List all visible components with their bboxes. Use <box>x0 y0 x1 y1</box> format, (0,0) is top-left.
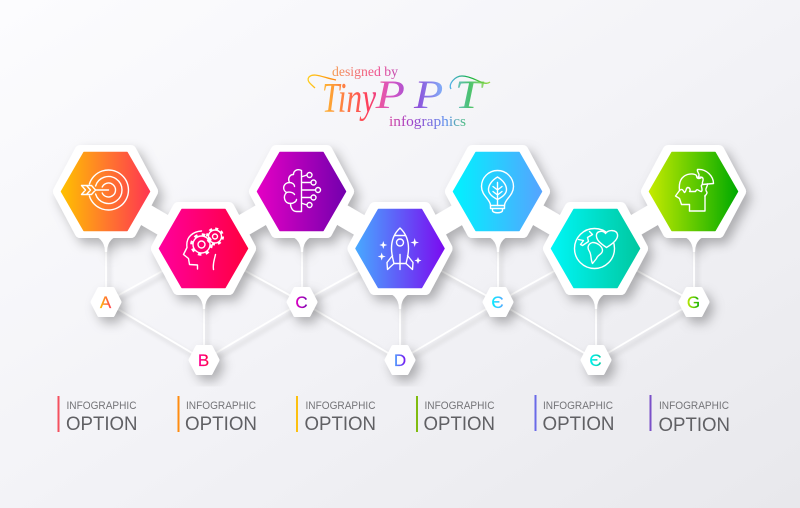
icon: head and gears <box>184 229 223 270</box>
white hexagon network <box>59 151 740 309</box>
option 2 <box>178 396 257 435</box>
large white hexagons <box>59 151 740 289</box>
letter A: A <box>100 293 112 312</box>
icon: target with arrow <box>82 170 128 210</box>
option 6 <box>650 395 730 436</box>
logo: designed by Tiny PPT infographics <box>308 65 490 130</box>
icon: stars <box>378 238 422 264</box>
option 6: INFOGRAPHIC <box>659 400 729 412</box>
logo: designed by Tiny PPT infographics: designed by <box>332 65 398 80</box>
logo: designed by Tiny PPT infographics: infographics <box>389 114 466 130</box>
letter E: Є <box>491 293 504 312</box>
option 2: OPTION <box>185 413 257 435</box>
letter G: G <box>687 293 700 312</box>
thin connecting lines <box>106 191 694 360</box>
icon: brain and circuit <box>284 170 320 212</box>
hexagon 3: brain circuit icon <box>258 152 346 230</box>
option 5: INFOGRAPHIC <box>543 400 613 412</box>
hexagon 7: head with puzzle icon <box>650 152 738 230</box>
option 3: INFOGRAPHIC <box>306 400 376 412</box>
option 4 <box>416 396 495 435</box>
hexagon 6: globe with heart icon <box>552 210 640 288</box>
line fillets <box>95 236 705 309</box>
option 4: OPTION <box>424 413 495 435</box>
logo: designed by Tiny PPT infographics: Tiny <box>322 76 376 122</box>
option 6: OPTION <box>658 414 730 436</box>
letter D: D <box>394 351 406 370</box>
hexagon 2: head with gears icon <box>160 210 248 288</box>
option 1: INFOGRAPHIC <box>66 400 137 412</box>
option 4: INFOGRAPHIC <box>424 400 495 412</box>
icon: bulb with leaf <box>482 170 514 213</box>
letter B: B <box>198 351 209 370</box>
option 1: OPTION <box>66 413 138 435</box>
icon: globe <box>574 228 618 268</box>
small white hexagons <box>92 288 708 374</box>
connectors between large hexagons <box>106 192 694 248</box>
option 5: OPTION <box>542 413 614 435</box>
icon: rocket <box>387 228 413 270</box>
hexagon 1: target icon <box>62 152 150 230</box>
option 3 <box>296 396 376 435</box>
logo: designed by Tiny PPT infographics: PPT <box>375 73 485 117</box>
option 3: OPTION <box>304 413 376 435</box>
option 1 <box>58 396 138 435</box>
letter C: C <box>295 293 308 312</box>
icon: head and puzzle <box>676 169 714 211</box>
small hexagon letters <box>100 293 700 370</box>
hexagon 4: rocket icon <box>356 210 444 288</box>
option 5 <box>534 395 614 435</box>
option 2: INFOGRAPHIC <box>186 400 256 412</box>
hexagon 5: light bulb icon <box>454 152 542 230</box>
letter F: Є <box>589 351 602 370</box>
